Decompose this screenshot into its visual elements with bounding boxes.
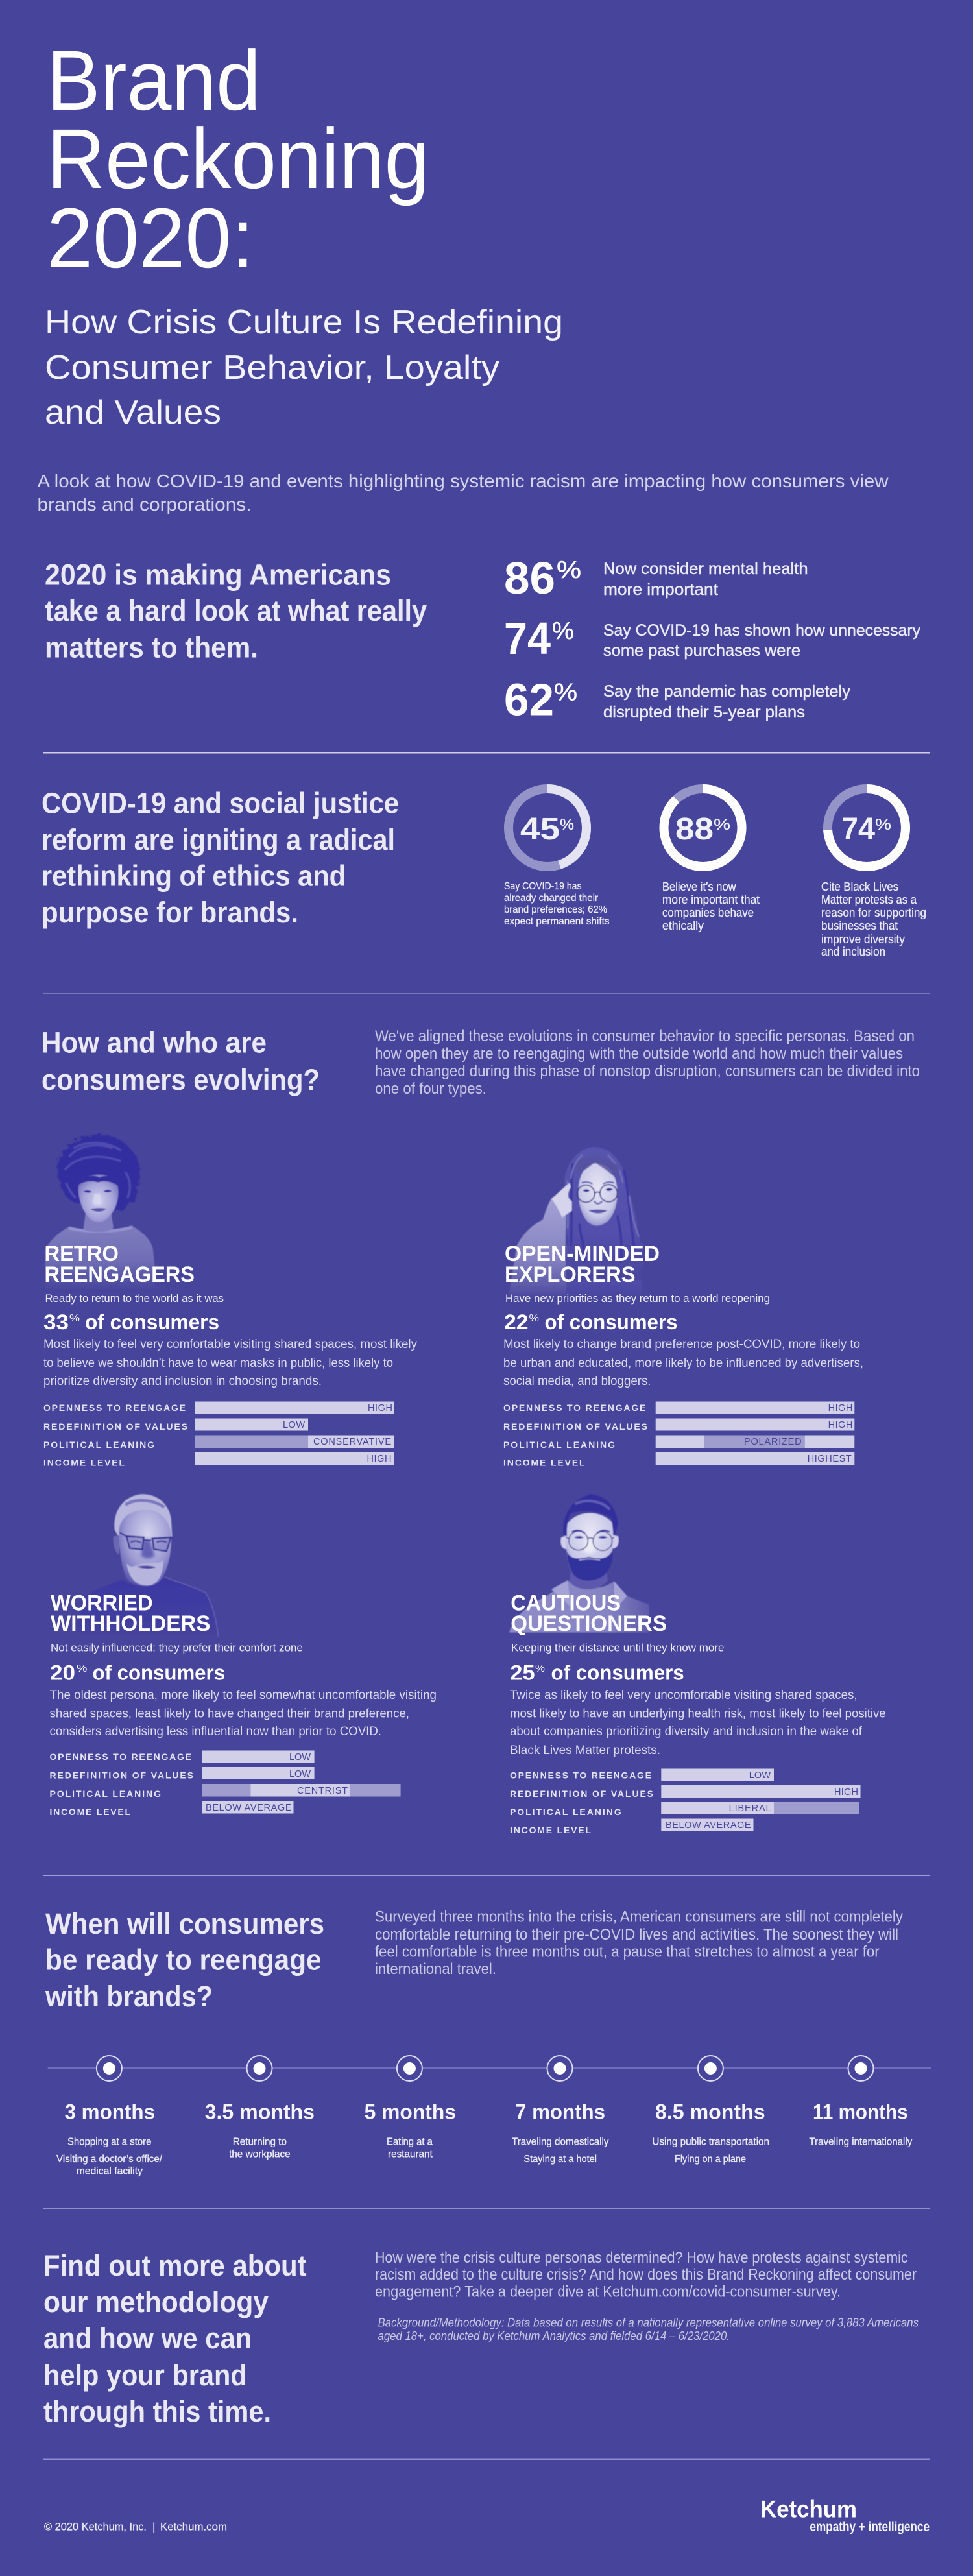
attribute bars: LOW (289, 1752, 311, 1763)
description: Most likely to feel very comfortable visiting shared spaces, most likely (43, 1338, 417, 1351)
text block: reengagement intro: international travel. (375, 1960, 496, 1978)
milestone: 8.5 months: Using public transportation (652, 2137, 769, 2148)
persona name (505, 1242, 660, 1287)
text block: persona intro: We've aligned these evolutions in consumer behavior to specific personas. Based on (375, 1028, 915, 1045)
text block: reengagement intro (375, 1908, 903, 1978)
caption: 45 percent (504, 881, 610, 927)
attribute bars: INCOME LEVEL (503, 1457, 585, 1467)
persona name: RETRO (44, 1242, 119, 1266)
main title: Reckoning (47, 111, 429, 206)
subtitle (45, 304, 563, 431)
share of consumers: 25 (510, 1661, 535, 1684)
Ketchum logo: empathy + intelligence (810, 2520, 930, 2534)
attribute bars (43, 1401, 394, 1467)
milestone: 8.5 months: Flying on a plane (675, 2154, 746, 2165)
share of consumers: % (69, 1313, 80, 1324)
heading: how and who (42, 1026, 320, 1096)
attribute bars: INCOME LEVEL (43, 1457, 125, 1467)
stat: 74 percent: 74 (504, 613, 551, 664)
description: considers advertising less influential now than prior to COVID. (49, 1725, 381, 1739)
attribute bars: HIGH (367, 1454, 392, 1464)
footer copyright: Ketchum.com (160, 2520, 227, 2533)
milestone: 3 months: 3 months (65, 2101, 155, 2124)
share of consumers: % (77, 1663, 87, 1674)
portrait: woman with round glasses (508, 1147, 644, 1299)
description (49, 1689, 437, 1739)
tagline: Keeping their distance until they know more (511, 1641, 724, 1654)
persona name: EXPLORERS (505, 1262, 636, 1287)
attribute bars: HIGHEST (808, 1454, 852, 1464)
milestone: 3.5 months: Returning to (233, 2137, 287, 2148)
stat: 86 percent: Now consider mental health (603, 560, 808, 578)
stat: 74 percent (504, 613, 920, 664)
milestone: 11 months: 11 months (813, 2101, 908, 2124)
donut: 88 percent (664, 789, 742, 867)
description: Twice as likely to feel very uncomfortable visiting shared spaces, (510, 1689, 858, 1702)
tagline: Not easily influenced: they prefer their comfort zone (51, 1641, 303, 1654)
stat: 62 percent: % (554, 679, 577, 706)
attribute bars: LOW (749, 1770, 771, 1781)
text block: reengagement intro: comfortable returning to their pre-COVID lives and activities. The soonest they will (375, 1926, 898, 1944)
main title (47, 32, 429, 285)
footer copyright: © 2020 Ketchum, Inc. (44, 2520, 147, 2533)
portrait: woman with curly hair (45, 1134, 155, 1290)
attribute bars: BELOW AVERAGE (206, 1803, 292, 1813)
caption: 74 percent: and inclusion (821, 945, 885, 958)
attribute bars: OPENNESS TO REENGAGE (49, 1751, 191, 1762)
description: be urban and educated, more likely to be influenced by advertisers, (503, 1356, 863, 1370)
text block: persona intro: how open they are to reengaging with the outside world and how much their values (375, 1045, 903, 1063)
subtitle: How Crisis Culture Is Redefining (45, 304, 563, 341)
text block: persona intro (375, 1028, 920, 1098)
description (510, 1689, 886, 1757)
attribute bars: INCOME LEVEL (49, 1807, 130, 1817)
attribute bars: OPENNESS TO REENGAGE (510, 1770, 651, 1780)
description (43, 1338, 417, 1388)
milestone: 11 months: Traveling internationally (810, 2137, 912, 2148)
attribute bars: POLITICAL LEANING (510, 1807, 621, 1817)
share of consumers: 20 (50, 1661, 75, 1684)
attribute bars: HIGH (834, 1787, 858, 1798)
stat: 74 percent: some past purchases were (603, 642, 800, 660)
persona name: WORRIED (51, 1591, 153, 1615)
main title: 2020: (47, 190, 254, 285)
attribute bars (49, 1750, 401, 1817)
panel: what really matters (45, 553, 920, 725)
milestone: 3 months: medical facility (77, 2166, 143, 2177)
milestone: 3 months: Visiting a doctor’s office/ (56, 2154, 163, 2165)
persona name: CAUTIOUS (511, 1591, 621, 1615)
panel: Worried Withholders (49, 1494, 437, 1817)
caption: 74 percent: Cite Black Lives (821, 880, 898, 893)
caption: 45 percent: brand preferences; 62% (504, 904, 607, 915)
subtitle: Consumer Behavior, Loyalty (45, 349, 499, 387)
persona name (44, 1242, 195, 1287)
heading: ethics and purpose: COVID-19 and social justice (42, 786, 399, 820)
description: about companies prioritizing diversity and inclusion in the wake of (510, 1725, 863, 1739)
text block: methodology questions (375, 2249, 917, 2301)
heading: find out more: and how we can (43, 2322, 252, 2355)
text block: reengagement intro: Surveyed three months into the crisis, American consumers are still not completely (375, 1908, 903, 1926)
donut: 88 percent: % (714, 816, 730, 834)
attribute bars: BELOW AVERAGE (666, 1820, 751, 1831)
heading: when will consumers reengage: be ready to reengage (45, 1944, 322, 1977)
caption: 88 percent: Believe it’s now (662, 880, 737, 893)
stat: 86 percent: % (557, 557, 581, 583)
description: social media, and bloggers. (503, 1375, 651, 1388)
share of consumers: of consumers (92, 1661, 225, 1684)
attribute bars: OPENNESS TO REENGAGE (503, 1402, 645, 1413)
portrait: older man with glasses (76, 1494, 219, 1637)
heading: find out more: help your brand (43, 2359, 247, 2392)
donut: 88 percent: 88 (675, 812, 714, 847)
heading: when will consumers reengage: When will consumers (45, 1907, 324, 1940)
stat: 62 percent: 62 (504, 675, 554, 725)
donut: 45 percent (509, 789, 586, 867)
donut: 74 percent: 74 (841, 812, 875, 847)
caption: 88 percent: more important that (662, 893, 760, 906)
attribute bars: INCOME LEVEL (510, 1825, 591, 1835)
attribute bars: POLITICAL LEANING (43, 1439, 154, 1450)
heading: what really matters (45, 558, 427, 664)
donut: 45 percent: % (560, 816, 574, 834)
milestone: 3.5 months: 3.5 months (205, 2101, 315, 2124)
stat: 86 percent: 86 (504, 553, 555, 603)
attribute bars: POLITICAL LEANING (503, 1439, 615, 1450)
milestone: 3.5 months (205, 2056, 315, 2160)
attribute bars: HIGH (368, 1403, 392, 1414)
footer copyright: | (152, 2520, 155, 2533)
donut: 74 percent (828, 789, 906, 867)
description: Black Lives Matter protests. (510, 1744, 660, 1757)
text block: methodology questions: racism added to the culture crisis? And how does this Brand Reckoning affect consumer (375, 2266, 917, 2283)
milestone: 3 months: Shopping at a store (67, 2137, 151, 2148)
attribute bars: OPENNESS TO REENGAGE (43, 1402, 186, 1413)
attribute bars: LOW (283, 1420, 305, 1430)
description: The oldest persona, more likely to feel somewhat uncomfortable visiting (49, 1689, 437, 1702)
caption: 74 percent: Matter protests as a (821, 893, 917, 906)
text block: background methodology: aged 18+, conducted by Ketchum Analytics and fielded 6/14 – 6/23/2020. (378, 2329, 730, 2342)
text block: persona intro: have changed during this phase of nonstop disruption, consumers can be divided into (375, 1063, 920, 1080)
persona name (51, 1591, 210, 1636)
attribute bars: POLARIZED (744, 1437, 802, 1447)
description: most likely to have an underlying health risk, most likely to feel positive (510, 1707, 886, 1720)
donut: 74 percent: % (875, 816, 891, 834)
milestone: 7 months: Staying at a hotel (523, 2154, 597, 2165)
attribute bars: REDEFINITION OF VALUES (503, 1421, 647, 1432)
caption: 74 percent (821, 880, 926, 958)
heading: ethics and purpose (42, 786, 399, 929)
attribute bars: CENTRIST (297, 1786, 348, 1796)
heading: find out more: our methodology (43, 2285, 269, 2318)
milestone: 3.5 months: the workplace (229, 2149, 291, 2160)
attribute bars (510, 1768, 860, 1835)
description (503, 1338, 863, 1388)
panel: Cautious Questioners (509, 1494, 886, 1835)
attribute bars: CONSERVATIVE (313, 1437, 391, 1447)
attribute bars: POLITICAL LEANING (49, 1788, 161, 1799)
attribute bars: LOW (289, 1769, 311, 1779)
heading: ethics and purpose: rethinking of ethics and (42, 859, 346, 893)
stat: 62 percent (504, 675, 850, 725)
attribute bars: HIGH (828, 1403, 852, 1414)
milestone: 11 months (810, 2056, 912, 2148)
portrait: bearded man with glasses (509, 1494, 649, 1633)
share of consumers: 33 (43, 1310, 69, 1334)
text block: methodology questions: engagement? Take a deeper dive at Ketchum.com/covid-consumer-survey. (375, 2283, 841, 2301)
heading: what really matters: matters to them. (45, 631, 258, 664)
caption: 88 percent: ethically (662, 919, 704, 932)
heading: how and who: How and who are (42, 1026, 267, 1059)
share of consumers: of consumers (551, 1661, 684, 1684)
stat: 86 percent (504, 553, 808, 603)
stat: 86 percent: more important (603, 581, 718, 599)
milestone: 7 months: 7 months (515, 2101, 605, 2124)
milestone: 3 months (56, 2056, 163, 2177)
heading: ethics and purpose: reform are igniting a radical (42, 823, 395, 856)
caption: 88 percent: companies behave (662, 906, 754, 919)
footer copyright (44, 2520, 227, 2533)
caption: 45 percent: Say COVID-19 has (504, 881, 581, 892)
caption: 45 percent: already changed their (504, 893, 599, 904)
tagline: Have new priorities as they return to a world reopening (505, 1292, 770, 1305)
milestone: 5 months: restaurant (388, 2149, 433, 2160)
panel: Open-Minded Explorers (503, 1147, 863, 1467)
text block: background methodology (378, 2316, 919, 2342)
caption: 74 percent: reason for supporting (821, 906, 926, 919)
description: prioritize diversity and inclusion in choosing brands. (43, 1375, 322, 1388)
subtitle: and Values (45, 394, 221, 431)
milestone: 8.5 months: 8.5 months (655, 2101, 765, 2124)
share of consumers: of consumers (545, 1310, 677, 1334)
persona name: QUESTIONERS (511, 1611, 667, 1636)
persona name (511, 1591, 667, 1636)
milestone: 5 months: 5 months (365, 2101, 456, 2124)
share of consumers: 22 (504, 1310, 528, 1334)
heading: what really matters: take a hard look at what really (45, 594, 427, 627)
intro text (38, 471, 889, 514)
donut: 45 percent: 45 (520, 812, 560, 847)
share of consumers: of consumers (85, 1310, 219, 1334)
text block: persona intro: one of four types. (375, 1080, 486, 1098)
attribute bars (503, 1401, 854, 1467)
caption: 74 percent: improve diversity (821, 933, 905, 946)
stat: 74 percent: % (552, 618, 574, 644)
heading: how and who: consumers evolving? (42, 1063, 320, 1096)
heading: find out more: through this time. (43, 2395, 271, 2428)
heading: when will consumers reengage (45, 1907, 324, 2013)
heading: find out more (43, 2249, 307, 2428)
panel: Retro Reengagers (43, 1134, 417, 1467)
stat: 74 percent: Say COVID-19 has shown how unnecessary (603, 621, 920, 640)
attribute bars: REDEFINITION OF VALUES (510, 1788, 653, 1799)
stat: 62 percent: Say the pandemic has completely (603, 682, 850, 701)
heading: find out more: Find out more about (43, 2249, 307, 2282)
share of consumers: % (529, 1313, 539, 1324)
milestone: 5 months: Eating at a (387, 2137, 433, 2148)
description: Most likely to change brand preference post-COVID, more likely to (503, 1338, 860, 1351)
milestone: 8.5 months (652, 2056, 769, 2165)
panel: ethics and purpose (42, 786, 926, 958)
description: to believe we shouldn’t have to wear masks in public, less likely to (43, 1356, 393, 1370)
milestone: 7 months: Traveling domestically (512, 2137, 608, 2148)
milestone: 5 months (365, 2056, 456, 2160)
persona name: REENGAGERS (44, 1262, 195, 1287)
intro text: brands and corporations. (38, 494, 252, 514)
attribute bars: REDEFINITION OF VALUES (49, 1770, 193, 1780)
caption: 74 percent: businesses that (821, 919, 898, 932)
main title: Brand (47, 32, 261, 128)
intro text: A look at how COVID-19 and events highlighting systemic racism are impacting how consumers view (38, 471, 889, 491)
milestone: 7 months (512, 2056, 608, 2165)
persona name: OPEN-MINDED (505, 1242, 660, 1266)
attribute bars: HIGH (828, 1420, 852, 1430)
description: shared spaces, least likely to have changed their brand preference, (49, 1707, 409, 1720)
stat: 62 percent: disrupted their 5-year plans (603, 703, 805, 721)
Ketchum logo (760, 2496, 930, 2534)
text block: reengagement intro: feel comfortable is three months out, a pause that stretches to almost a year for (375, 1944, 880, 1961)
heading: when will consumers reengage: with brands? (45, 1980, 213, 2013)
heading: what really matters: 2020 is making Americans (45, 558, 391, 592)
Ketchum logo: Ketchum (760, 2496, 857, 2523)
caption: 88 percent (662, 880, 760, 932)
caption: 45 percent: expect permanent shifts (504, 916, 610, 927)
heading: ethics and purpose: purpose for brands. (42, 896, 298, 929)
text block: background methodology: Background/Methodology: Data based on results of a nationally representative online survey of 3,883 Americans (378, 2316, 919, 2329)
text block: methodology questions: How were the crisis culture personas determined? How have protests against systemic (375, 2249, 908, 2267)
timeline (48, 2056, 931, 2177)
attribute bars: LIBERAL (729, 1803, 771, 1814)
share of consumers: % (535, 1663, 545, 1674)
persona name: WITHHOLDERS (51, 1611, 210, 1636)
attribute bars: REDEFINITION OF VALUES (43, 1421, 187, 1432)
tagline: Ready to return to the world as it was (45, 1292, 224, 1305)
